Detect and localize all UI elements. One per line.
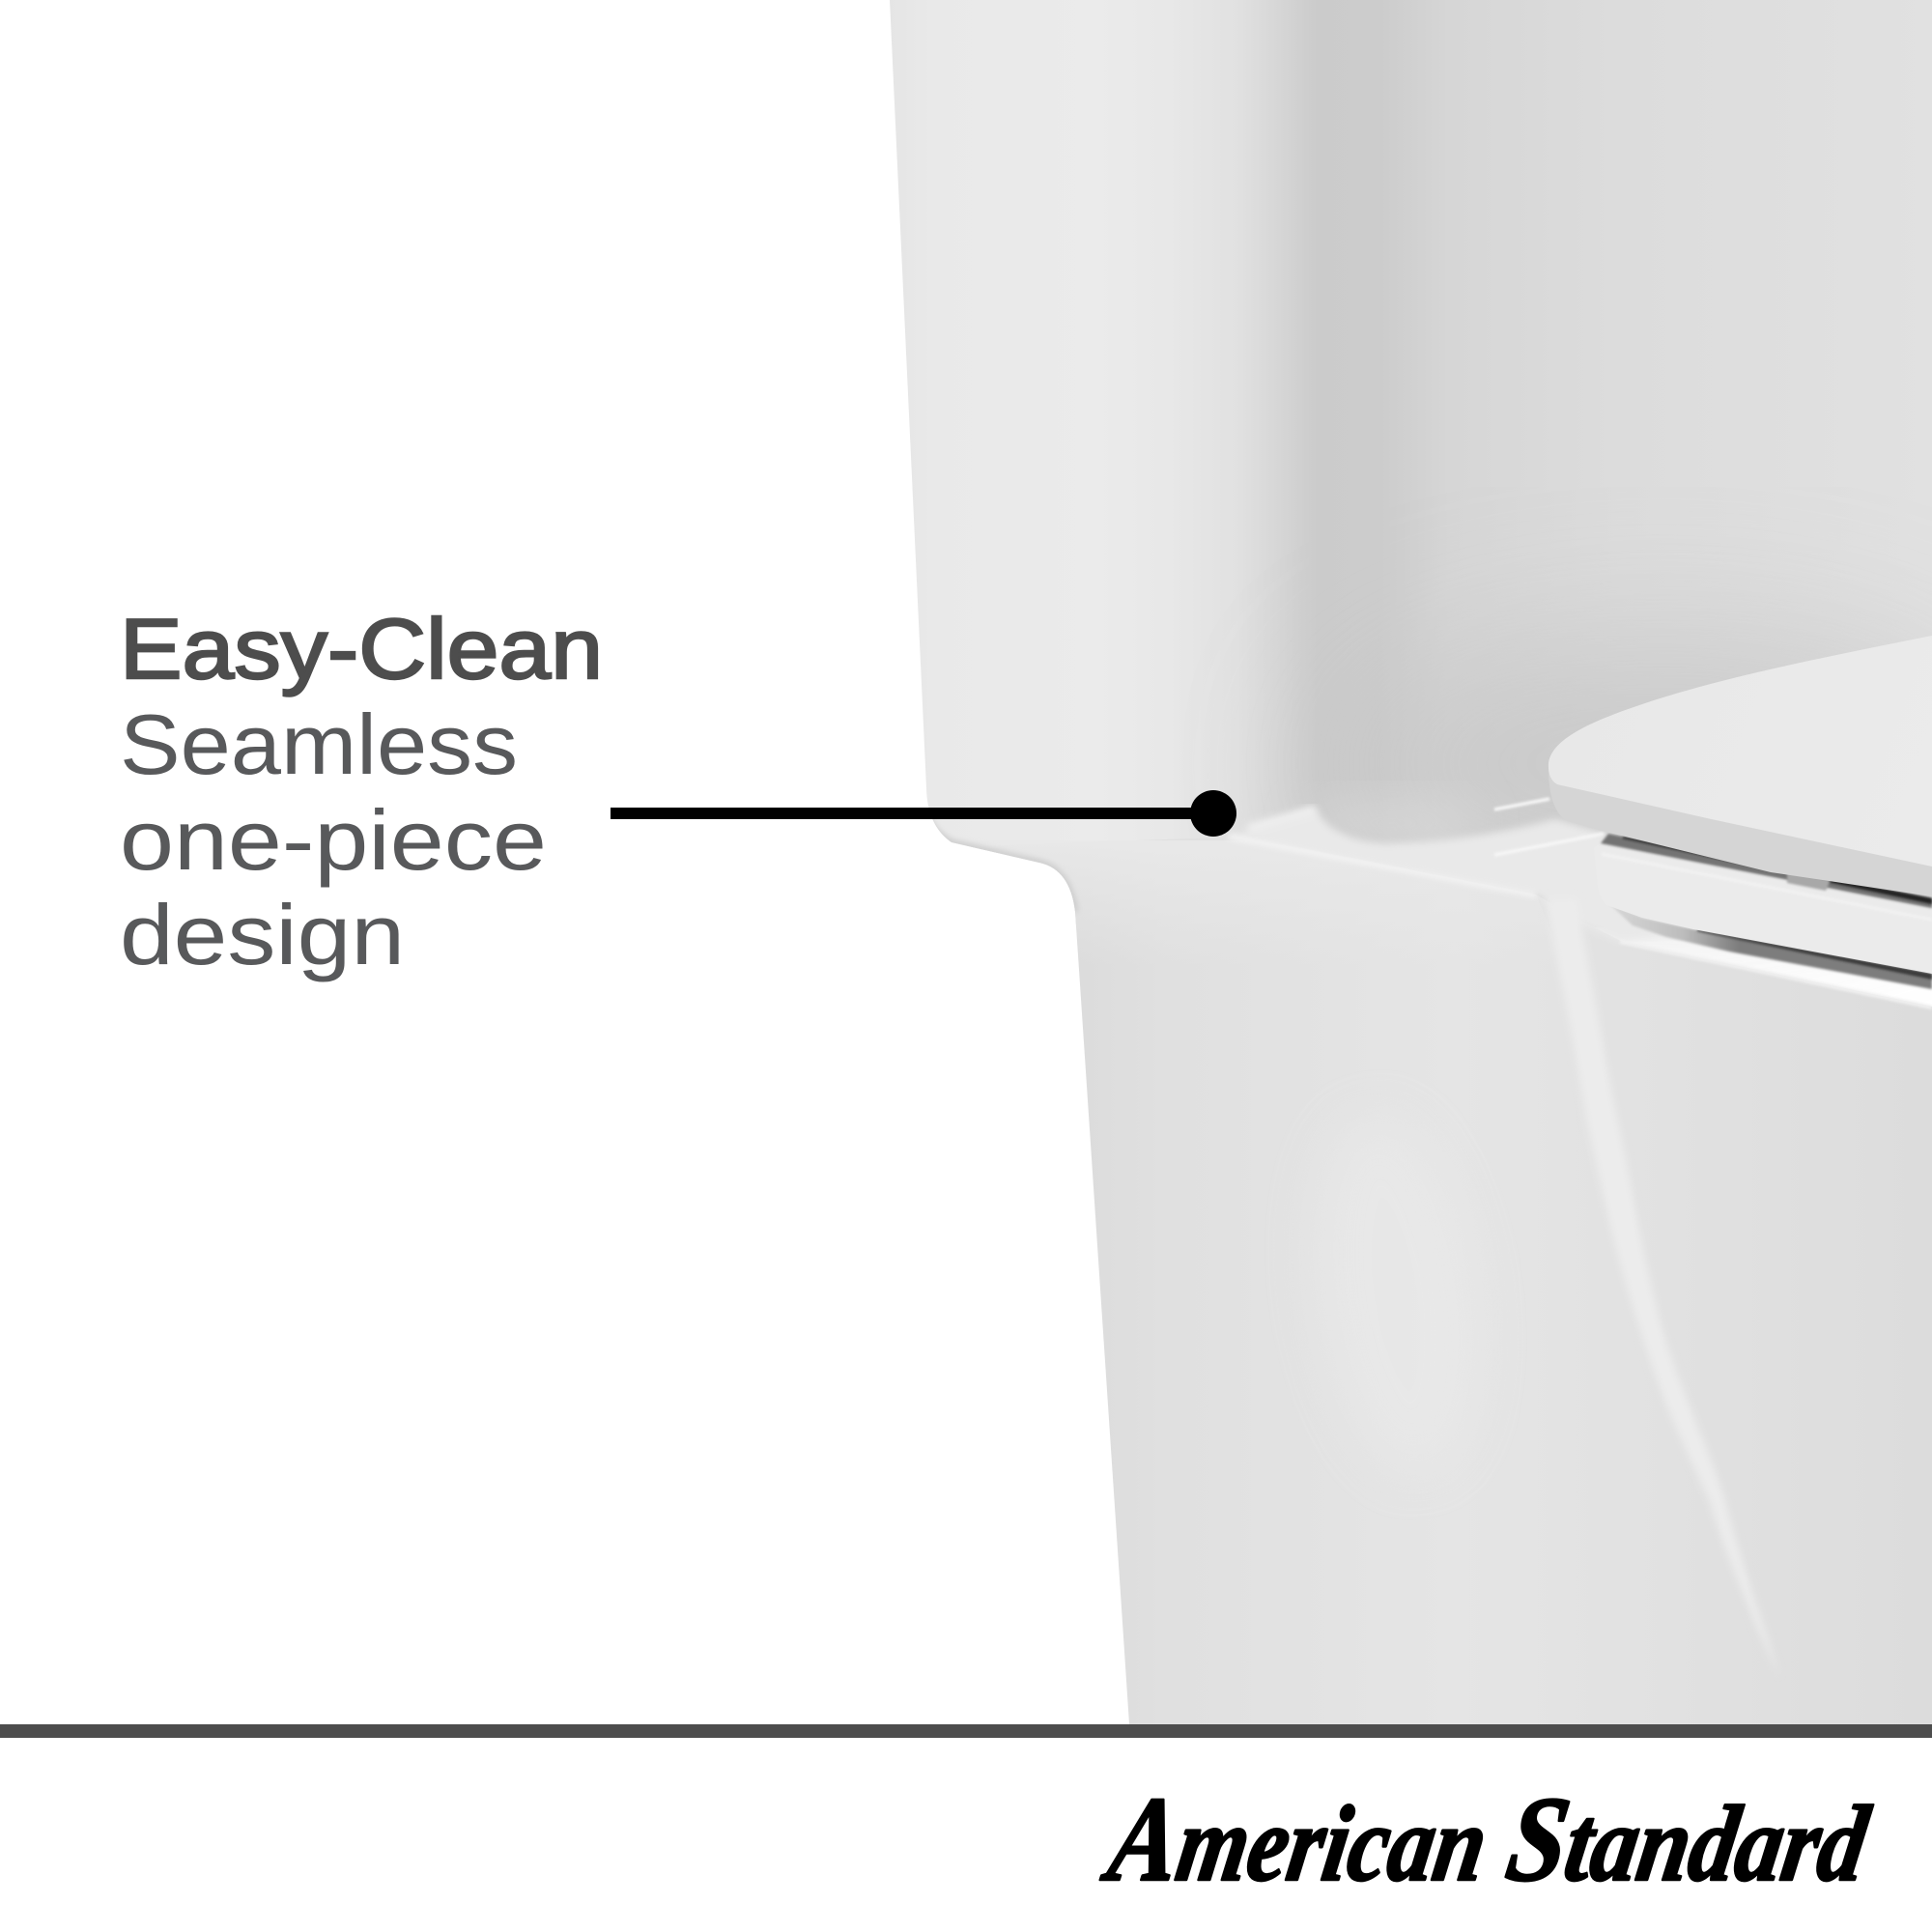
chrome glint in the gap [1787,871,1831,891]
body line 2: one-piece [120,792,547,888]
toilet photo: one-piece tank and bowl [869,0,1932,1739]
ring bevel highlight [1602,854,1932,920]
bowl rim highlight [1620,942,1932,1008]
callout pointer line and dot [611,790,1236,837]
shadow under the ring [1608,903,1932,989]
blend between tank base and bowl [989,840,1182,883]
heading: Easy-Clean [120,601,603,696]
logo: American Standard [1095,1773,1879,1907]
bowl surface [1075,840,1932,1724]
soft glow at the base of the tank recess [1304,802,1478,844]
seat hinge glints [1494,799,1604,855]
body line 1: Seamless [120,696,518,792]
tank surface [869,0,1932,927]
text block: feature callout [120,601,603,982]
deck highlight [1229,837,1536,895]
logo: American Standard: Standard [1499,1773,1879,1907]
bowl faint reflection [1294,1107,1497,1482]
bowl sweep highlight [1553,914,1760,1625]
black edge in lower gap [1697,929,1932,980]
shaded edge of tank corner [933,819,1078,912]
tank shadow above the seat [1333,638,1932,889]
deck behind the seat [1249,811,1654,939]
seat lid top [1548,636,1932,867]
dark gap above the ring [1601,834,1932,908]
tank junction highlight [1248,810,1316,829]
black edge in upper gap [1623,837,1932,904]
seat lid side [1548,768,1932,896]
seat ring [1611,850,1932,974]
body line 3: design [120,887,405,982]
logo: American Standard: American [1095,1773,1497,1907]
bottom divider bar [0,1724,1932,1738]
